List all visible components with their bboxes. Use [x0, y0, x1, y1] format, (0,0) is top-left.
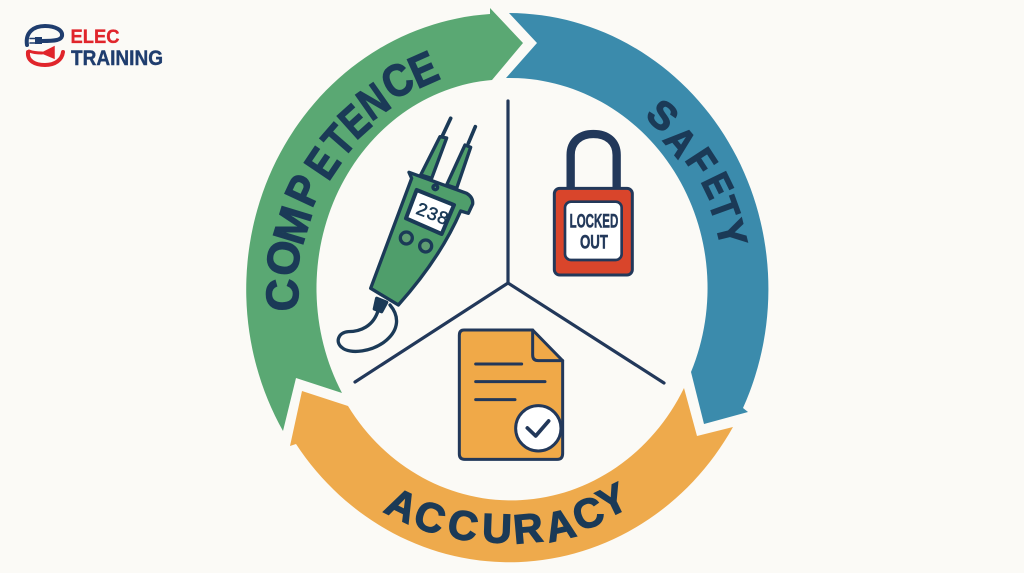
label: accuracy	[378, 474, 635, 553]
tester reading: 238	[412, 198, 452, 231]
padlock text: locked: LOCKED	[570, 211, 618, 232]
label: safety: E	[693, 166, 742, 205]
label: accuracy: A	[378, 478, 425, 533]
icon: padlock	[554, 134, 632, 275]
label: accuracy: C	[408, 491, 451, 544]
icon: voltage tester	[338, 118, 475, 351]
label: safety: S	[638, 91, 686, 141]
padlock label	[565, 202, 622, 260]
label: safety: T	[700, 191, 749, 225]
padlock text: out: OUT	[580, 233, 608, 254]
logo word: ELEC: ELEC	[70, 27, 120, 48]
label: safety: A	[656, 117, 706, 165]
label: accuracy: C	[566, 487, 610, 540]
label: competence: C	[257, 279, 308, 311]
tester connector	[374, 298, 387, 312]
label: competence: M	[264, 201, 322, 250]
label: competence: P	[276, 168, 333, 213]
logo: Elec Training	[27, 26, 163, 70]
label: accuracy: C	[444, 500, 482, 551]
label: accuracy: U	[481, 505, 513, 552]
document fold	[533, 330, 563, 361]
tester body	[371, 172, 473, 305]
label: competence: C	[373, 52, 422, 109]
tester probes	[421, 118, 475, 188]
tester cable	[338, 305, 397, 351]
dividers: three-way split	[355, 101, 664, 383]
tester screen	[406, 190, 454, 234]
label: competence: T	[312, 115, 365, 165]
label: competence: O	[256, 237, 311, 279]
padlock body	[554, 188, 632, 275]
label: competence: E	[328, 94, 380, 148]
label: safety	[638, 91, 755, 251]
label: competence: E	[401, 41, 445, 98]
label: accuracy: Y	[590, 474, 635, 527]
icon: checked document	[459, 330, 563, 459]
label: competence	[256, 41, 445, 311]
label: competence: N	[348, 73, 399, 130]
padlock shackle	[571, 134, 617, 192]
logo word: TRAINING: TRAINING	[71, 47, 163, 70]
label: competence: E	[295, 139, 350, 188]
cycle arrow: accuracy	[290, 388, 733, 562]
logo icon: plug and socket	[27, 26, 63, 65]
label: accuracy: A	[541, 500, 580, 551]
cycle arrow: competence	[246, 8, 523, 431]
document sheet	[459, 330, 563, 459]
label: safety: F	[677, 140, 726, 182]
label: accuracy: R	[511, 504, 545, 553]
cycle arrow: safety	[506, 13, 768, 424]
label: safety: Y	[707, 216, 755, 251]
document text lines	[476, 364, 545, 400]
check badge	[516, 406, 561, 451]
tester buttons	[400, 232, 432, 252]
